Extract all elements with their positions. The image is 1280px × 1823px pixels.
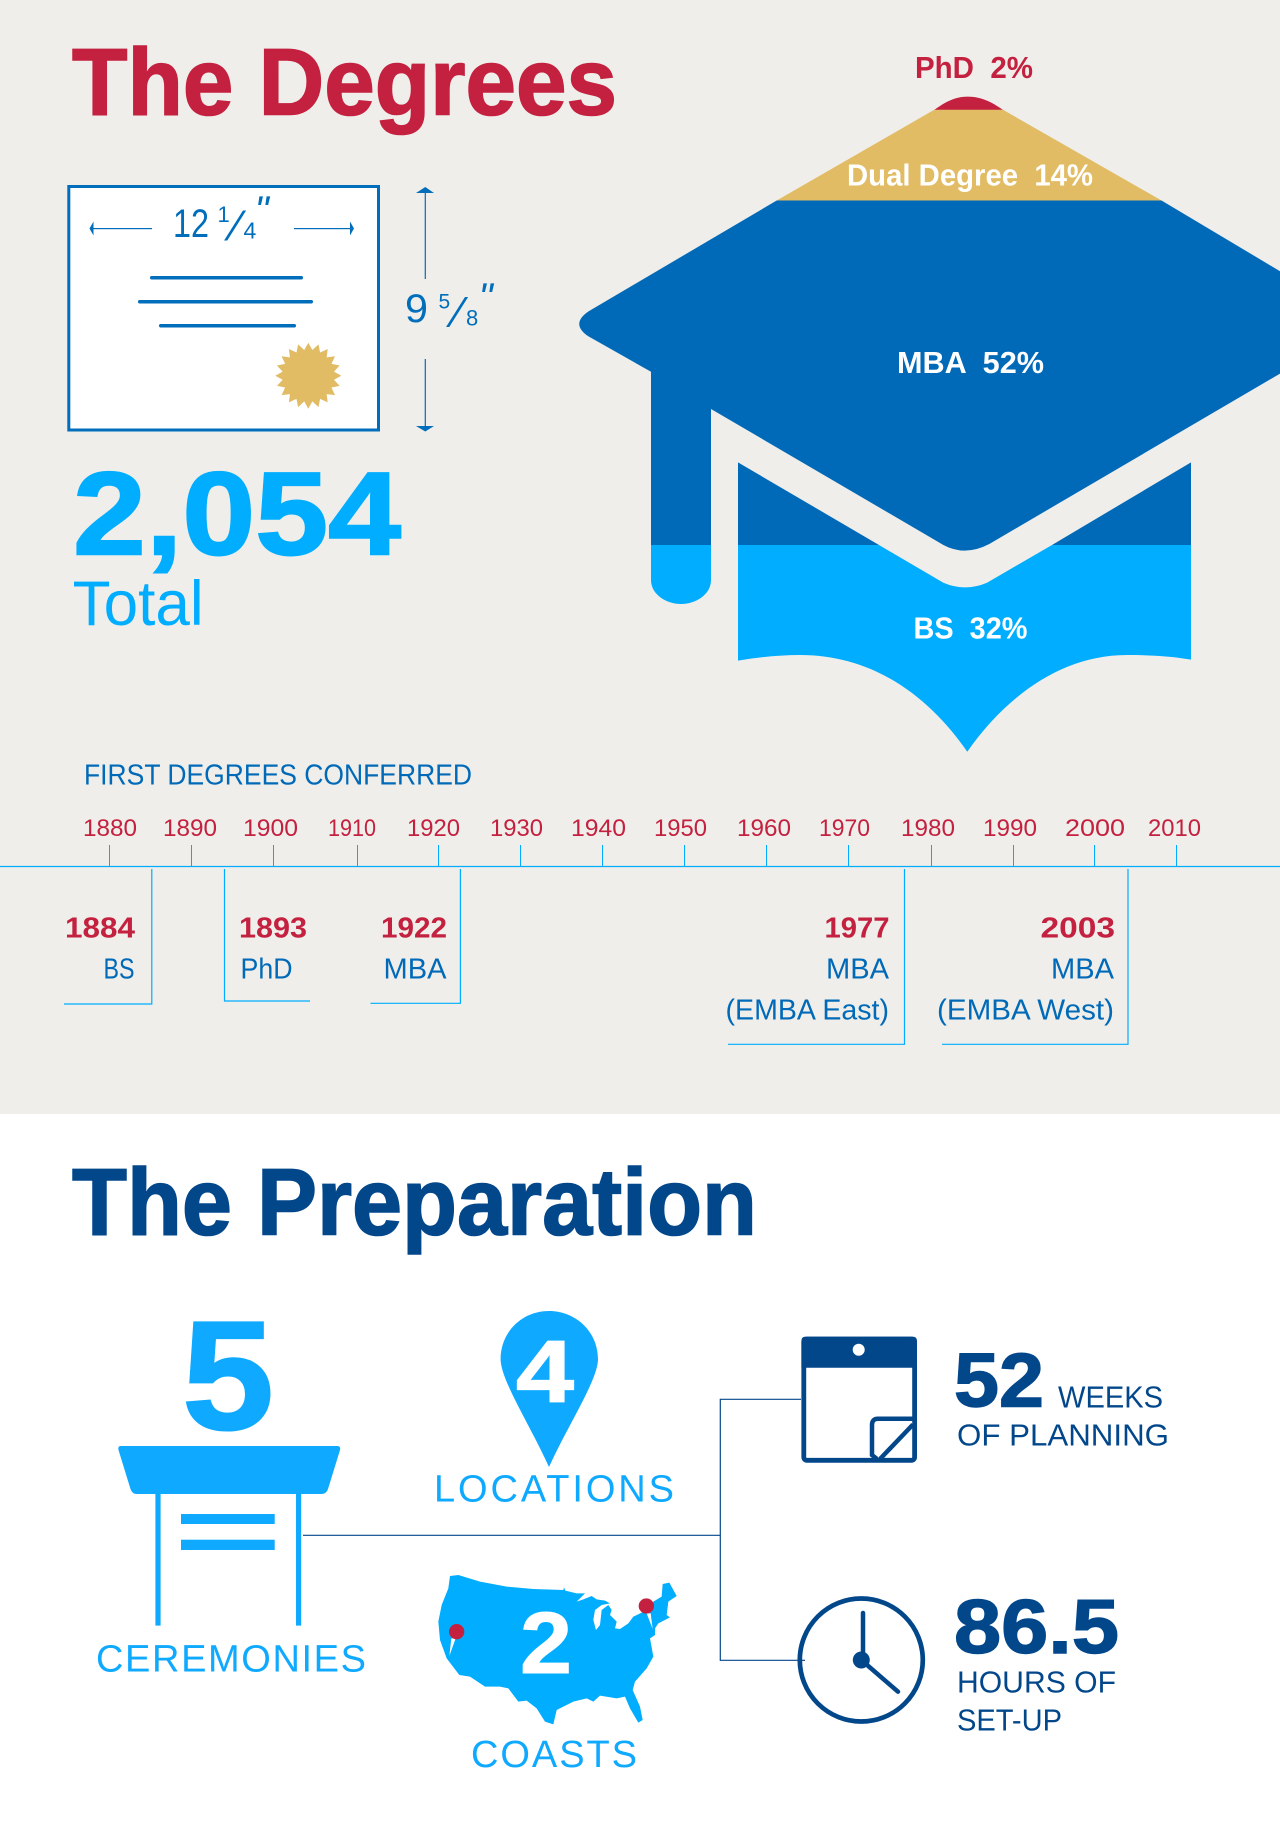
timeline axis and ticks — [0, 845, 1280, 866]
height dimension arrow — [416, 187, 434, 432]
milestone: 2003 MBA EMBA West: MBA — [1051, 953, 1115, 985]
label: hours of set-up — [957, 1665, 1116, 1738]
width label: ⁄ — [224, 202, 247, 250]
decade labels: 1880 — [83, 815, 137, 842]
width label: 4 — [244, 218, 256, 244]
width label — [173, 189, 270, 250]
height label: 9 — [405, 287, 428, 331]
connector lines — [303, 1399, 805, 1660]
number 5: 5 — [182, 1289, 274, 1462]
width label: " — [254, 189, 270, 233]
icon: United States map with pins — [438, 1575, 677, 1724]
decade labels: 2010 — [1148, 815, 1201, 842]
decade labels: 1890 — [163, 815, 217, 842]
height label: 8 — [466, 306, 478, 330]
width label: 1 — [218, 202, 230, 227]
number 52: 52 — [954, 1339, 1044, 1424]
number 4: 4 — [516, 1322, 574, 1421]
milestone: 1922 MBA: 1922 — [381, 912, 447, 944]
icon: map pin — [501, 1311, 598, 1467]
milestone: 1893 PhD: PhD — [240, 953, 292, 985]
milestone: 1922 MBA: MBA — [384, 953, 447, 985]
decade labels: 1900 — [243, 815, 298, 842]
width label: 12 — [173, 202, 209, 246]
milestone: 1977 MBA EMBA East: MBA — [826, 953, 890, 985]
stat: 86.5 hours of set-up — [798, 1585, 1119, 1738]
milestone: 1884 BS — [64, 869, 152, 1004]
icon: lectern — [118, 1446, 340, 1626]
cap segment: BS — [651, 545, 1191, 752]
decade labels: 2000 — [1065, 815, 1125, 842]
height label — [405, 276, 494, 337]
milestone: 1922 MBA — [370, 869, 460, 1003]
decade labels: 1920 — [407, 815, 460, 842]
heading: The Preparation: The Preparation — [72, 1149, 757, 1255]
number 86.5: 86.5 — [954, 1585, 1119, 1670]
cap segment: PhD: PhD 2% — [915, 50, 1033, 85]
cap segment: MBA: MBA 52% — [897, 345, 1044, 380]
label: ceremonies: CEREMONIES — [96, 1638, 366, 1680]
label: coasts: COASTS — [471, 1734, 637, 1776]
milestone: 1977 MBA EMBA East — [726, 869, 904, 1044]
diploma certificate — [69, 186, 379, 430]
icon: clock — [798, 1598, 923, 1722]
milestone: 1893 PhD — [224, 869, 310, 1001]
height label: 5 — [438, 290, 450, 314]
total degrees count: Total — [73, 569, 204, 639]
decade labels — [83, 815, 1201, 842]
total degrees count: 2,054 — [73, 448, 401, 580]
milestone: 2003 MBA EMBA West — [937, 869, 1128, 1044]
chart: graduation cap degree shares — [579, 50, 1280, 752]
cap segment: Dual Degree — [777, 110, 1162, 200]
stat: 5 ceremonies — [96, 1289, 366, 1680]
milestone: 1884 BS: 1884 — [65, 912, 135, 944]
label: locations: LOCATIONS — [434, 1469, 674, 1511]
decade labels: 1930 — [490, 815, 543, 842]
decade labels: 1970 — [819, 815, 870, 842]
decade labels: 1980 — [901, 815, 955, 842]
decade labels: 1940 — [571, 815, 626, 842]
cap segment: BS: BS 32% — [914, 610, 1028, 645]
decade labels: 1960 — [737, 815, 791, 842]
stat: 4 locations — [434, 1311, 674, 1511]
label: hours of set-up: HOURS OF — [957, 1665, 1116, 1700]
cap segment: MBA — [579, 200, 1280, 551]
milestone: 1977 MBA EMBA East: 1977 — [824, 912, 890, 944]
stat: 2 coasts — [438, 1575, 677, 1776]
milestone: 1893 PhD: 1893 — [239, 912, 307, 944]
label: weeks of planning: WEEKS — [1058, 1380, 1163, 1415]
timeline heading: FIRST DEGREES CONFERRED — [84, 760, 472, 792]
panel: first degrees conferred timeline — [0, 760, 1280, 1044]
milestone: 1884 BS: BS — [104, 953, 134, 985]
milestone: 1977 MBA EMBA East: (EMBA East) — [726, 994, 889, 1026]
decade labels: 1910 — [328, 815, 376, 842]
icon: calendar — [801, 1337, 917, 1460]
label: weeks of planning: OF PLANNING — [957, 1418, 1169, 1453]
milestone: 2003 MBA EMBA West: (EMBA West) — [937, 994, 1114, 1026]
decade labels: 1950 — [654, 815, 707, 842]
height label: " — [478, 276, 494, 320]
width dimension arrow — [90, 222, 354, 236]
milestone: 2003 MBA EMBA West: 2003 — [1040, 912, 1115, 944]
stat: 52 weeks of planning — [801, 1337, 1169, 1460]
heading: The Degrees: The Degrees — [72, 30, 617, 136]
height label: ⁄ — [446, 288, 469, 337]
total degrees count — [73, 448, 401, 639]
cap segment: Dual Degree: Dual Degree 14% — [847, 157, 1093, 192]
panel: diploma size — [69, 186, 495, 432]
decade labels: 1990 — [983, 815, 1037, 842]
label: hours of set-up: SET-UP — [957, 1703, 1062, 1738]
cap segment: PhD — [915, 50, 1033, 110]
label: weeks of planning — [957, 1380, 1169, 1453]
number 2: 2 — [520, 1595, 572, 1692]
